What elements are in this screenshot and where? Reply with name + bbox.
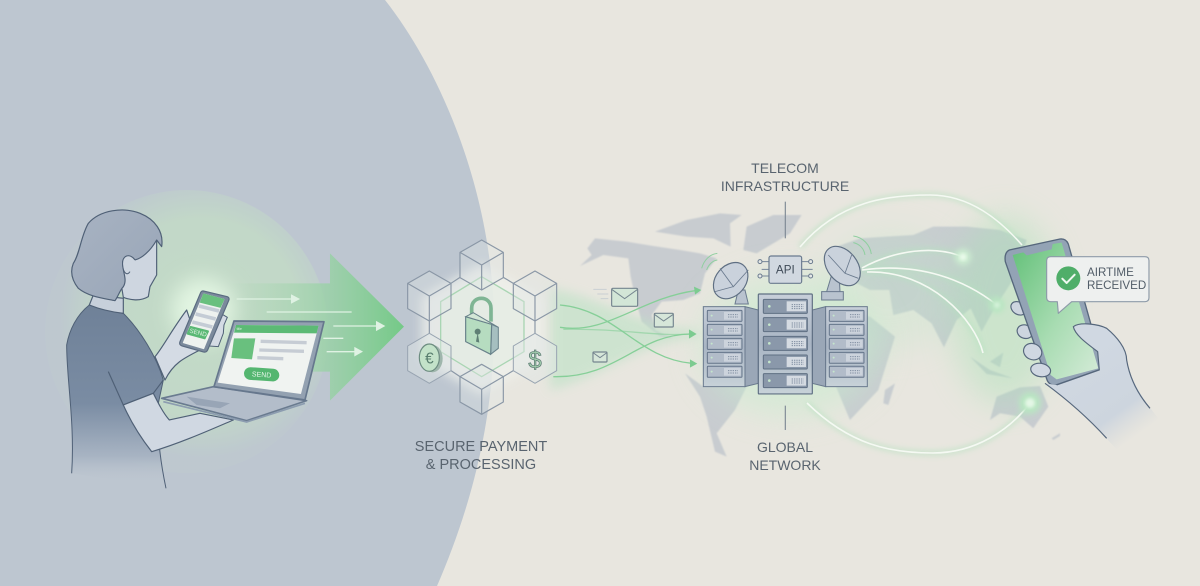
left satellite dish <box>706 256 755 306</box>
dollar hexagon: $ <box>528 347 542 374</box>
inner hexagon <box>441 277 524 377</box>
label: infrastructure: INFRASTRUCTURE <box>721 178 849 194</box>
label: airtime: AIRTIME <box>1087 266 1134 279</box>
bottom cube <box>460 364 503 414</box>
envelope small <box>593 352 607 362</box>
world map <box>580 213 1060 457</box>
upper right cube <box>513 271 557 321</box>
front fingers <box>1021 340 1052 378</box>
left panel <box>0 0 494 586</box>
forearm to phone <box>155 310 200 380</box>
center rack <box>758 294 812 394</box>
right satellite dish <box>817 239 868 300</box>
label: secure payment: SECURE PAYMENT <box>415 439 547 455</box>
padlock <box>466 298 498 354</box>
network glow <box>700 215 1060 415</box>
green halo <box>45 190 328 473</box>
map: madagascar <box>883 383 895 405</box>
laptop screen <box>214 321 324 400</box>
big green arrow <box>230 253 404 401</box>
phone screen <box>1013 243 1098 379</box>
phone glow <box>172 278 235 342</box>
ear <box>123 256 135 274</box>
map: new zealand <box>1052 433 1060 440</box>
torso <box>67 305 166 488</box>
neck <box>89 295 123 313</box>
person with laptop and phone: SEND <box>252 371 271 380</box>
envelope large <box>593 288 638 306</box>
phone body <box>1005 239 1103 385</box>
map: arctic islands <box>655 213 742 247</box>
notification callout <box>1047 257 1149 313</box>
motion lines <box>237 295 384 355</box>
label: telecom: TELECOM <box>751 160 819 176</box>
hand and wrist <box>1045 324 1158 455</box>
sleeve shadow <box>108 372 163 405</box>
left rack <box>703 307 758 387</box>
api chip <box>758 256 813 283</box>
torso outline <box>67 305 166 488</box>
label: received: RECEIVED <box>1087 279 1146 292</box>
secure payment hexagon network <box>408 240 557 473</box>
connectors <box>429 277 535 377</box>
label: processing: & PROCESSING <box>426 457 536 473</box>
laptop base <box>162 387 307 421</box>
top cubes <box>460 240 503 290</box>
hair <box>72 210 162 301</box>
signal waves right <box>853 236 871 255</box>
arm under laptop <box>123 393 233 452</box>
phone <box>180 291 229 352</box>
network nodes <box>955 249 1041 414</box>
hand holding phone <box>1005 239 1158 455</box>
euro hexagon: € <box>425 350 434 367</box>
api chip: API <box>776 263 795 276</box>
connector bottom <box>784 406 787 430</box>
glowing network arcs <box>800 195 1041 453</box>
arc lines <box>800 195 1030 453</box>
dollar hexagon <box>513 333 557 383</box>
back fingers <box>208 314 227 347</box>
map: south america <box>685 373 747 457</box>
person with laptop and phone <box>45 190 404 488</box>
flow arrowheads <box>689 287 701 368</box>
connector top <box>784 202 787 238</box>
arc glow <box>800 195 1030 453</box>
map: borneo <box>990 353 1003 367</box>
laptop screen content <box>231 338 255 359</box>
phone: SEND <box>189 328 208 339</box>
send button <box>244 367 280 382</box>
hand outline <box>1045 324 1150 438</box>
flow lines <box>553 291 695 377</box>
label: network: NETWORK <box>749 457 821 473</box>
upper left cube <box>408 271 451 321</box>
face <box>120 240 157 300</box>
person with laptop and phone: title <box>237 327 242 331</box>
check icon <box>1056 266 1080 290</box>
map: north america <box>580 238 717 338</box>
ribbon glow <box>550 288 698 390</box>
label: global: GLOBAL <box>757 439 813 455</box>
data ribbons <box>550 287 701 390</box>
map: eurasia <box>833 227 1027 347</box>
map: greenland <box>743 215 802 253</box>
back fingers <box>1008 299 1035 341</box>
telecom infrastructure <box>702 160 871 473</box>
right rack <box>812 307 867 387</box>
map: africa <box>820 307 895 420</box>
map: southeast asia <box>970 357 1013 378</box>
hexagon glow <box>422 263 543 395</box>
signal waves left <box>702 253 717 270</box>
map: australia <box>990 386 1048 428</box>
envelope medium <box>654 313 673 327</box>
euro hexagon <box>408 333 451 383</box>
